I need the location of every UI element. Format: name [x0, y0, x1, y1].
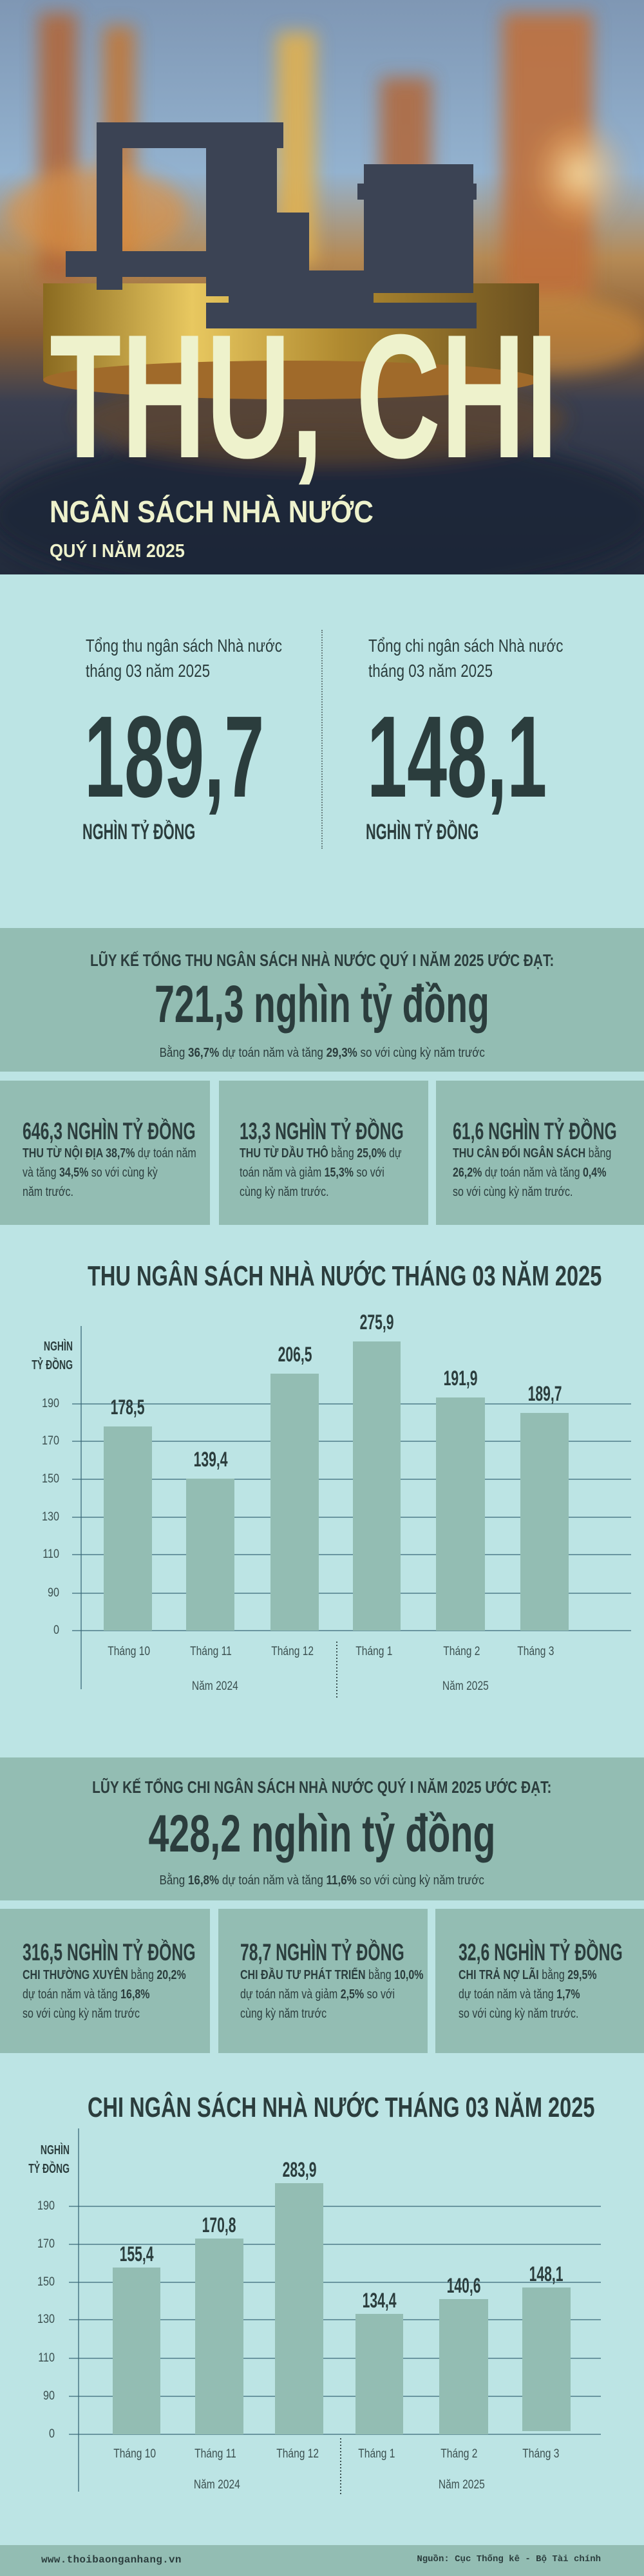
bar chart: revenue: Năm 2025	[442, 1680, 489, 1693]
box: domestic revenue: THU TỪ NỘI ĐỊA 38,7% dự toán năm	[23, 1146, 196, 1160]
bar chart: expenditure: 150	[37, 2275, 55, 2289]
bar chart: revenue: Tháng 1	[355, 1645, 393, 1658]
box: interest payment: dự toán năm và tăng 1,7%	[459, 1987, 580, 2002]
stat: total expenditure: tháng 03 năm 2025	[368, 661, 493, 681]
stat: total revenue: Tổng thu ngân sách Nhà nước	[86, 636, 282, 656]
bar chart: revenue: 189,7	[528, 1382, 562, 1405]
bar chart: expenditure	[28, 2128, 601, 2494]
panel: revenue summary	[0, 928, 644, 1072]
box: domestic revenue: 646,3 NGHÌN TỶ ĐỒNG	[23, 1118, 196, 1144]
box: recurrent spending: dự toán năm và tăng 16,8%	[23, 1987, 150, 2002]
box: crude oil revenue: cùng kỳ năm trước.	[240, 1185, 329, 1199]
box: crude oil revenue: toán năm và giảm 15,3% so với	[240, 1166, 384, 1180]
bar chart: expenditure: 148,1	[529, 2262, 563, 2286]
stat: total expenditure	[366, 636, 563, 844]
bar chart: revenue: NGHÌN	[44, 1340, 73, 1354]
bar chart: revenue	[32, 1311, 631, 1698]
chart title: expenditure: CHI NGÂN SÁCH NHÀ NƯỚC THÁNG 03 NĂM 2025	[88, 2092, 594, 2123]
box: budget balance revenue: THU CÂN ĐỐI NGÂN SÁCH bằng	[453, 1146, 611, 1160]
box: interest payment	[435, 1909, 644, 2053]
bar chart: revenue: Tháng 10	[108, 1645, 150, 1658]
bar chart: revenue: 191,9	[444, 1367, 477, 1390]
box: recurrent spending: CHI THƯỜNG XUYÊN bằng 20,2%	[23, 1968, 186, 1982]
box: development investment	[218, 1909, 428, 2053]
bar chart: expenditure: NGHÌN	[41, 2143, 70, 2157]
subtitle: NGÂN SÁCH NHÀ NƯỚC	[50, 495, 374, 529]
box: development investment: cùng kỳ năm trước	[240, 2007, 327, 2021]
bar chart: revenue: 139,4	[194, 1448, 227, 1471]
hero image	[0, 0, 644, 574]
bar chart: revenue: 110	[43, 1548, 59, 1561]
bar chart: expenditure: TỶ ĐỒNG	[28, 2162, 70, 2176]
bar chart: expenditure: 190	[37, 2199, 55, 2213]
bar chart: revenue: 275,9	[360, 1311, 393, 1334]
gear	[43, 283, 539, 380]
bar chart: expenditure: Tháng 11	[194, 2447, 236, 2461]
box: recurrent spending: so với cùng kỳ năm trước	[23, 2007, 140, 2021]
bar chart: revenue: 0	[53, 1624, 59, 1637]
machinery	[66, 122, 477, 328]
box: crude oil revenue: 13,3 NGHÌN TỶ ĐỒNG	[240, 1118, 404, 1144]
panel: expenditure summary	[0, 1757, 644, 1900]
bar chart: expenditure: Tháng 3	[522, 2447, 560, 2461]
box: budget balance revenue	[436, 1081, 644, 1225]
box: budget balance revenue: 26,2% dự toán năm và tăng 0,4%	[453, 1166, 606, 1180]
box: domestic revenue	[0, 1081, 210, 1225]
footer	[0, 2545, 644, 2576]
stat: total expenditure: 148,1	[367, 692, 547, 822]
bar chart: revenue: Tháng 2	[443, 1645, 480, 1658]
footer: Nguồn: Cục Thống kê - Bộ Tài chính	[417, 2554, 601, 2564]
bar chart: expenditure: 155,4	[120, 2242, 153, 2266]
footer: www.thoibaonganhang.vn	[41, 2554, 182, 2566]
chart title: revenue: THU NGÂN SÁCH NHÀ NƯỚC THÁNG 03 NĂM 2025	[88, 1260, 601, 1292]
bar chart: revenue: Tháng 11	[190, 1645, 231, 1658]
bar chart: revenue: 178,5	[111, 1396, 144, 1419]
bar chart: revenue: TỶ ĐỒNG	[32, 1358, 73, 1372]
box: domestic revenue: năm trước.	[23, 1185, 73, 1199]
panel: revenue summary: LŨY KẾ TỔNG THU NGÂN SÁCH NHÀ NƯỚC QUÝ I NĂM 2025 ƯỚC ĐẠT:	[90, 951, 554, 970]
box: crude oil revenue	[219, 1081, 428, 1225]
title: THU, CHI: THU, CHI	[50, 298, 558, 495]
subtitle date: QUÝ I NĂM 2025	[50, 541, 185, 562]
bar chart: expenditure: 134,4	[363, 2289, 396, 2312]
panel: revenue summary: 721,3 nghìn tỷ đồng	[155, 975, 489, 1034]
bar chart: expenditure: Tháng 1	[358, 2447, 395, 2461]
bar chart: expenditure: 130	[37, 2313, 55, 2326]
box: budget balance revenue: 61,6 NGHÌN TỶ ĐỒNG	[453, 1118, 617, 1144]
bar chart: expenditure: 110	[38, 2351, 55, 2365]
box: budget balance revenue: so với cùng kỳ năm trước.	[453, 1185, 573, 1199]
panel: expenditure summary: LŨY KẾ TỔNG CHI NGÂN SÁCH NHÀ NƯỚC QUÝ I NĂM 2025 ƯỚC ĐẠT:	[92, 1777, 552, 1797]
panel: revenue summary: Bằng 36,7% dự toán năm và tăng 29,3% so với cùng kỳ năm trước	[159, 1046, 485, 1060]
box: crude oil revenue: THU TỪ DẦU THÔ bằng 25,0% dự	[240, 1146, 402, 1160]
stat: total revenue: tháng 03 năm 2025	[86, 661, 210, 681]
bar chart: revenue: 206,5	[278, 1343, 312, 1366]
bar chart: expenditure: 283,9	[283, 2158, 316, 2181]
box: development investment: CHI ĐẦU TƯ PHÁT TRIỂN bằng 10,0%	[240, 1968, 423, 1982]
bar chart: expenditure: Tháng 12	[276, 2447, 319, 2461]
bar chart: revenue: Tháng 12	[271, 1645, 314, 1658]
bar chart: revenue: Tháng 3	[517, 1645, 554, 1658]
box: recurrent spending: 316,5 NGHÌN TỶ ĐỒNG	[23, 1939, 196, 1965]
box: development investment: dự toán năm và giảm 2,5% so với	[240, 1987, 395, 2002]
bar chart: expenditure: Tháng 10	[113, 2447, 156, 2461]
bar chart: expenditure: Năm 2024	[194, 2478, 240, 2492]
stat: total revenue: 189,7	[84, 692, 264, 822]
bar chart: expenditure: 90	[43, 2389, 55, 2403]
box: interest payment: so với cùng kỳ năm trước.	[459, 2007, 578, 2021]
bar chart: expenditure: Năm 2025	[439, 2478, 485, 2492]
bar chart: revenue: 170	[42, 1434, 59, 1448]
box: interest payment: 32,6 NGHÌN TỶ ĐỒNG	[459, 1939, 623, 1965]
stat: total expenditure: Tổng chi ngân sách Nhà nước	[368, 636, 563, 656]
panel: expenditure summary: Bằng 16,8% dự toán năm và tăng 11,6% so với cùng kỳ năm trước	[160, 1873, 484, 1888]
box: interest payment: CHI TRẢ NỢ LÃI bằng 29,5%	[459, 1968, 597, 1982]
bar chart: revenue: 190	[42, 1397, 59, 1410]
bar chart: expenditure: 170,8	[202, 2213, 236, 2237]
box: domestic revenue: và tăng 34,5% so với cùng kỳ	[23, 1166, 158, 1180]
bar chart: expenditure: 0	[49, 2427, 55, 2441]
bar chart: revenue: 130	[42, 1510, 59, 1524]
bar chart: revenue: 90	[48, 1586, 59, 1600]
stat: total expenditure: NGHÌN TỶ ĐỒNG	[366, 820, 478, 844]
stat: total revenue	[82, 636, 282, 844]
bar chart: expenditure: 170	[37, 2237, 55, 2251]
stat: total revenue: NGHÌN TỶ ĐỒNG	[82, 820, 195, 844]
panel: expenditure summary: 428,2 nghìn tỷ đồng	[149, 1804, 495, 1863]
box: development investment: 78,7 NGHÌN TỶ ĐỒNG	[240, 1939, 404, 1965]
bar chart: revenue: 150	[42, 1472, 59, 1486]
bar chart: expenditure: Tháng 2	[440, 2447, 478, 2461]
bar chart: revenue: Năm 2024	[192, 1680, 238, 1693]
box: recurrent spending	[0, 1909, 210, 2053]
bar chart: expenditure: 140,6	[447, 2274, 480, 2297]
